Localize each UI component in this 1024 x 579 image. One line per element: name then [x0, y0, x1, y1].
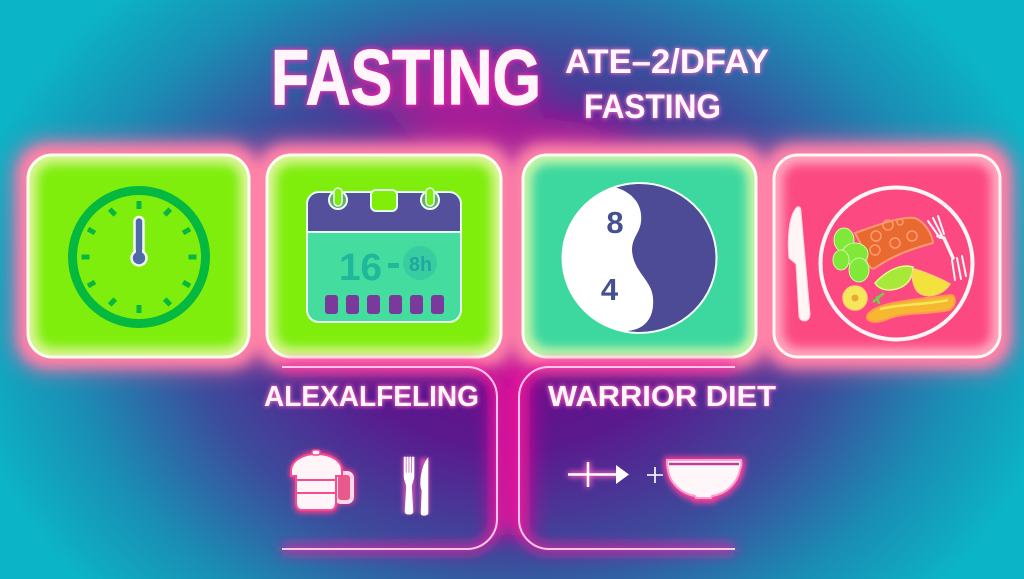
clock hand — [132, 217, 146, 266]
icon: knife — [788, 207, 810, 321]
subtitle: ATE-2/DFAY FASTING: FASTING — [584, 88, 721, 126]
panel: Warrior Diet — [519, 367, 776, 549]
icon: calendar: 8h — [409, 254, 432, 276]
heading: ALEXALFELING: ALEXALFELING — [264, 381, 479, 413]
icon: arrow with cross — [568, 462, 663, 487]
icon: plate with food — [820, 188, 972, 340]
panel: meal plate card — [774, 155, 1000, 357]
title glow — [335, 55, 632, 153]
icon: clock — [72, 190, 206, 324]
subtitle: ATE-2/DFAY FASTING: FASTING — [584, 88, 721, 126]
numbers: 8 and 4: 4 — [601, 272, 619, 307]
panel: 16:8 split card — [523, 155, 756, 357]
icon: calendar — [307, 188, 461, 322]
numbers: 8 and 4 — [601, 205, 624, 307]
subtitle: ATE-2/DFAY FASTING — [565, 43, 769, 126]
subtitle: ATE-2/DFAY FASTING: ATE–2/DFAY — [565, 43, 769, 81]
card glows — [18, 145, 1010, 367]
icon: yin-yang split circle — [562, 183, 716, 333]
calendar label: 16 — [339, 247, 382, 289]
icon: fork — [928, 216, 966, 280]
heading: WARRIOR DIET: WARRIOR DIET — [548, 381, 776, 413]
food: pineapple ring — [843, 286, 867, 310]
panel: Alexalfeling — [264, 367, 497, 549]
panel: calendar card — [267, 155, 501, 357]
food: salmon — [855, 218, 933, 269]
food: fish strip — [867, 295, 955, 322]
card wide glows — [14, 141, 1014, 371]
icon: fork and knife — [403, 457, 429, 515]
numbers: 8 and 4: 8 — [606, 205, 624, 240]
food: greens — [833, 228, 869, 282]
icon: bowl — [664, 457, 745, 503]
food: lemon — [913, 269, 950, 296]
title: FASTING: FASTING — [271, 33, 541, 121]
heading: WARRIOR DIET: WARRIOR DIET — [548, 381, 776, 413]
lower panels glow — [282, 367, 735, 549]
food: lime — [875, 266, 913, 290]
food: herb — [873, 293, 884, 304]
panel: clock card — [28, 155, 249, 357]
subtitle: ATE-2/DFAY FASTING: ATE–2/DFAY — [565, 43, 769, 81]
icon: coffee press mug — [290, 450, 355, 513]
heading: ALEXALFELING: ALEXALFELING — [264, 381, 479, 413]
centre magenta glow behind lower panels — [494, 350, 530, 535]
title: FASTING: FASTING — [271, 33, 541, 121]
